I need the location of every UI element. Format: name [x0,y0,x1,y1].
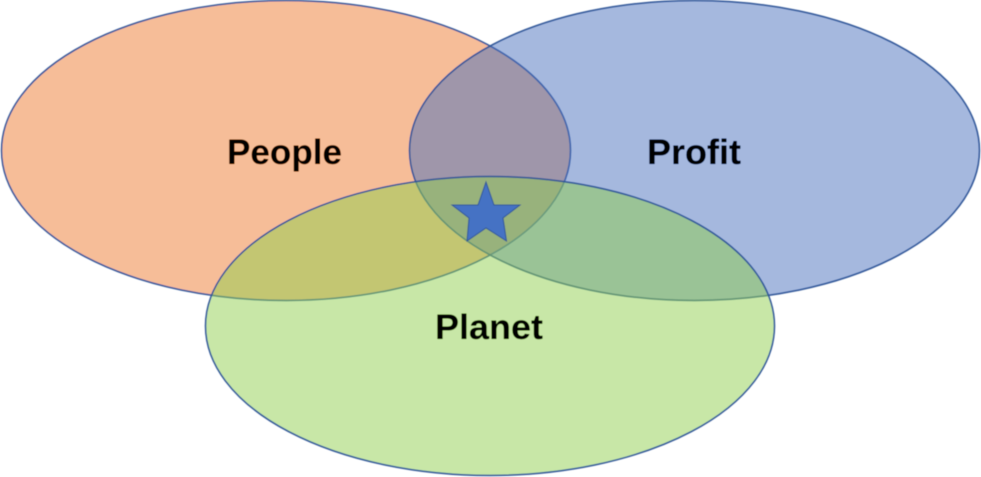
label: People: People [227,133,342,172]
label: Planet: Planet [435,308,543,347]
icon: star [452,182,520,241]
ellipse: Profit [410,0,980,300]
label: Profit: Profit [647,133,741,172]
ellipse: Planet [206,176,774,476]
ellipse: People [2,0,570,300]
